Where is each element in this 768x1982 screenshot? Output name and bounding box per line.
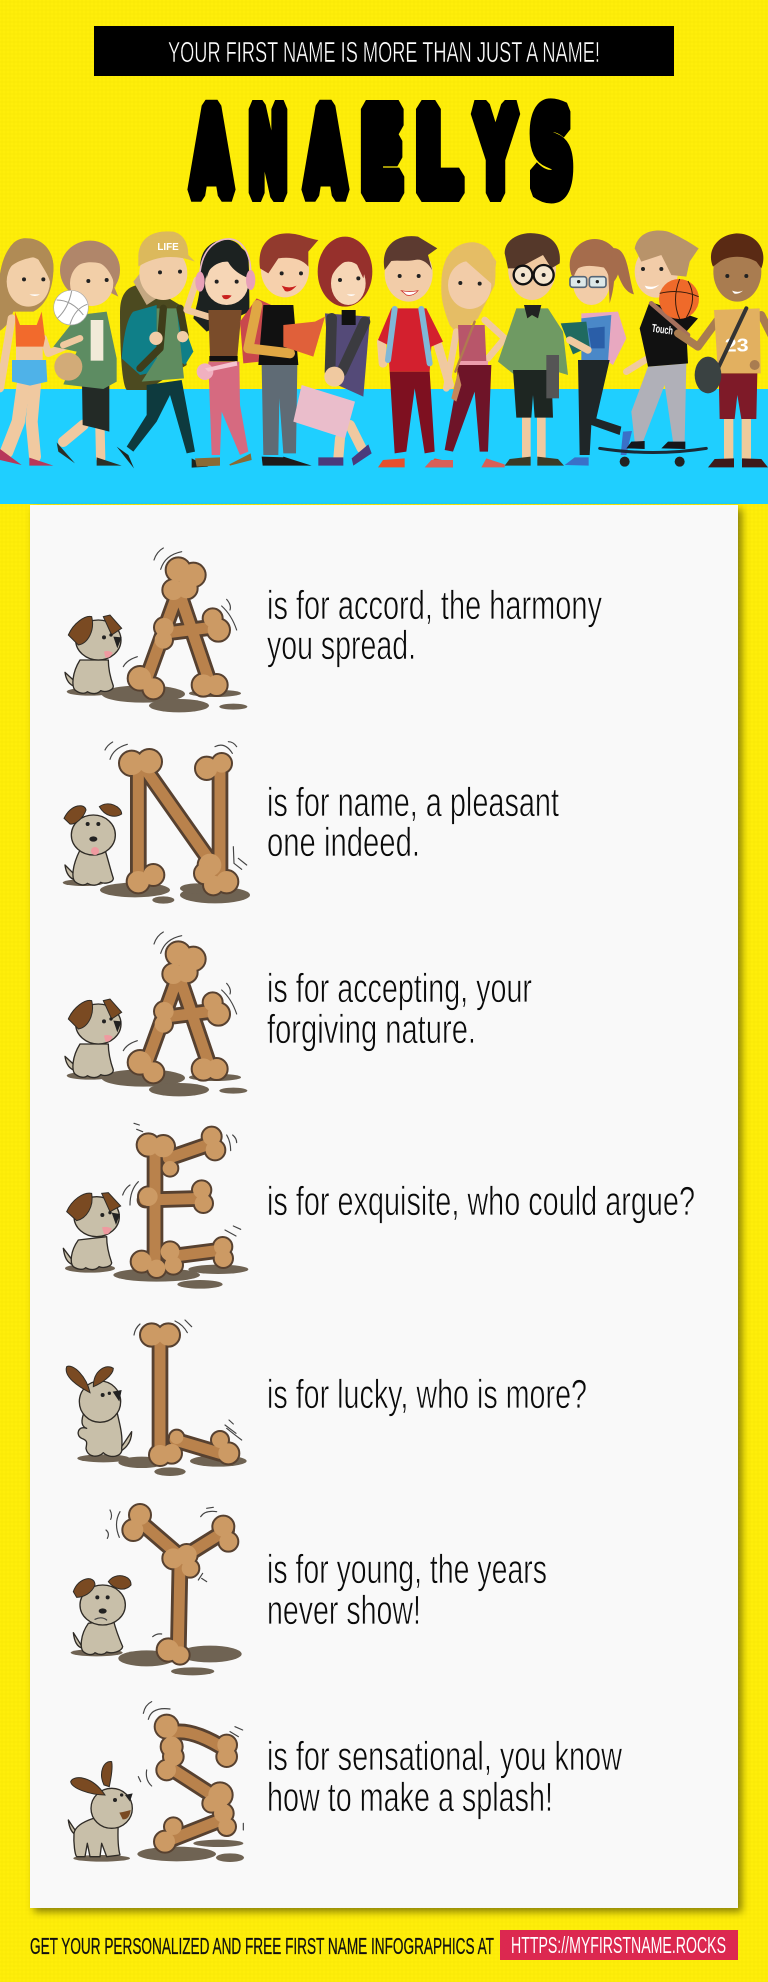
text: Y line (267, 1546, 547, 1633)
title: name: S (530, 87, 573, 221)
text: Y line: is for young, the years (267, 1546, 547, 1592)
text: S line (267, 1733, 622, 1820)
text: A line (267, 965, 532, 1052)
title: name: E (360, 87, 404, 221)
title: name (191, 87, 573, 221)
person 3: hiker with backpack and cap: LIFE (157, 242, 179, 253)
illustration: group of people, right half (378, 231, 768, 467)
icon: dog and bone letter E (63, 1123, 248, 1289)
row A: accord (65, 548, 602, 712)
title: name: N (248, 87, 288, 221)
person 10: girl with ponytail and tablet (561, 239, 634, 466)
text: N line: is for name, a pleasant (267, 779, 559, 825)
person 12: boy in tank top: 23 (725, 335, 749, 356)
text: A line: you spread. (267, 622, 416, 668)
person 2: green jacket with volleyball (53, 241, 122, 466)
text: N line (267, 779, 559, 865)
icon: dog and bone letter A (65, 932, 247, 1096)
text: Y line: never show! (267, 1587, 421, 1633)
text: A line: is for accord, the harmony (267, 582, 602, 628)
floor band (0, 389, 768, 504)
text: S line: is for sensational, you know (267, 1733, 622, 1779)
person 8: blonde girl (425, 242, 505, 467)
person 5: boy with red backpack and book (240, 233, 325, 466)
illustration: group of people, left half (0, 231, 372, 468)
icon: dog and bone letter S (68, 1702, 244, 1862)
row Y: young (71, 1506, 547, 1675)
person 6: red-haired girl with pink bag (293, 237, 372, 466)
text: A line: is for accepting, your (267, 965, 532, 1011)
title: name: Y (474, 87, 517, 221)
text: S line: how to make a splash! (267, 1774, 553, 1820)
title: name: A (191, 87, 232, 221)
title banner (94, 26, 674, 76)
row E: exquisite (63, 1123, 695, 1289)
title: name: L (415, 87, 461, 221)
icon: dog and bone letter Y (71, 1506, 242, 1675)
title: name: A (305, 87, 346, 221)
text: A line (267, 582, 602, 668)
text: A line: forgiving nature. (267, 1006, 476, 1052)
icon: dog and bone letter A (65, 548, 247, 712)
person 3: hiker with backpack and cap (117, 231, 208, 468)
person 9: boy with black glasses (498, 233, 568, 466)
icon: dog and bone letter L (66, 1320, 247, 1476)
person 11: skateboarder with basketball: Touch (651, 323, 674, 338)
person 11: skateboarder with basketball (600, 231, 706, 467)
person 1: girl in orange top (0, 238, 77, 466)
row A: accepting (65, 932, 532, 1096)
row S: sensational (68, 1702, 622, 1862)
text: L line: is for lucky, who is more? (267, 1371, 587, 1417)
row N: name (63, 742, 559, 904)
person 12: boy in tank top (678, 233, 768, 467)
icon: dog and bone letter N (63, 742, 250, 904)
panel: letter list (30, 505, 738, 1908)
person 7: boy in red shirt (378, 236, 453, 467)
row L: lucky (66, 1320, 587, 1476)
text: N line: one indeed. (267, 819, 420, 865)
person 4: girl with headphones (187, 239, 255, 467)
